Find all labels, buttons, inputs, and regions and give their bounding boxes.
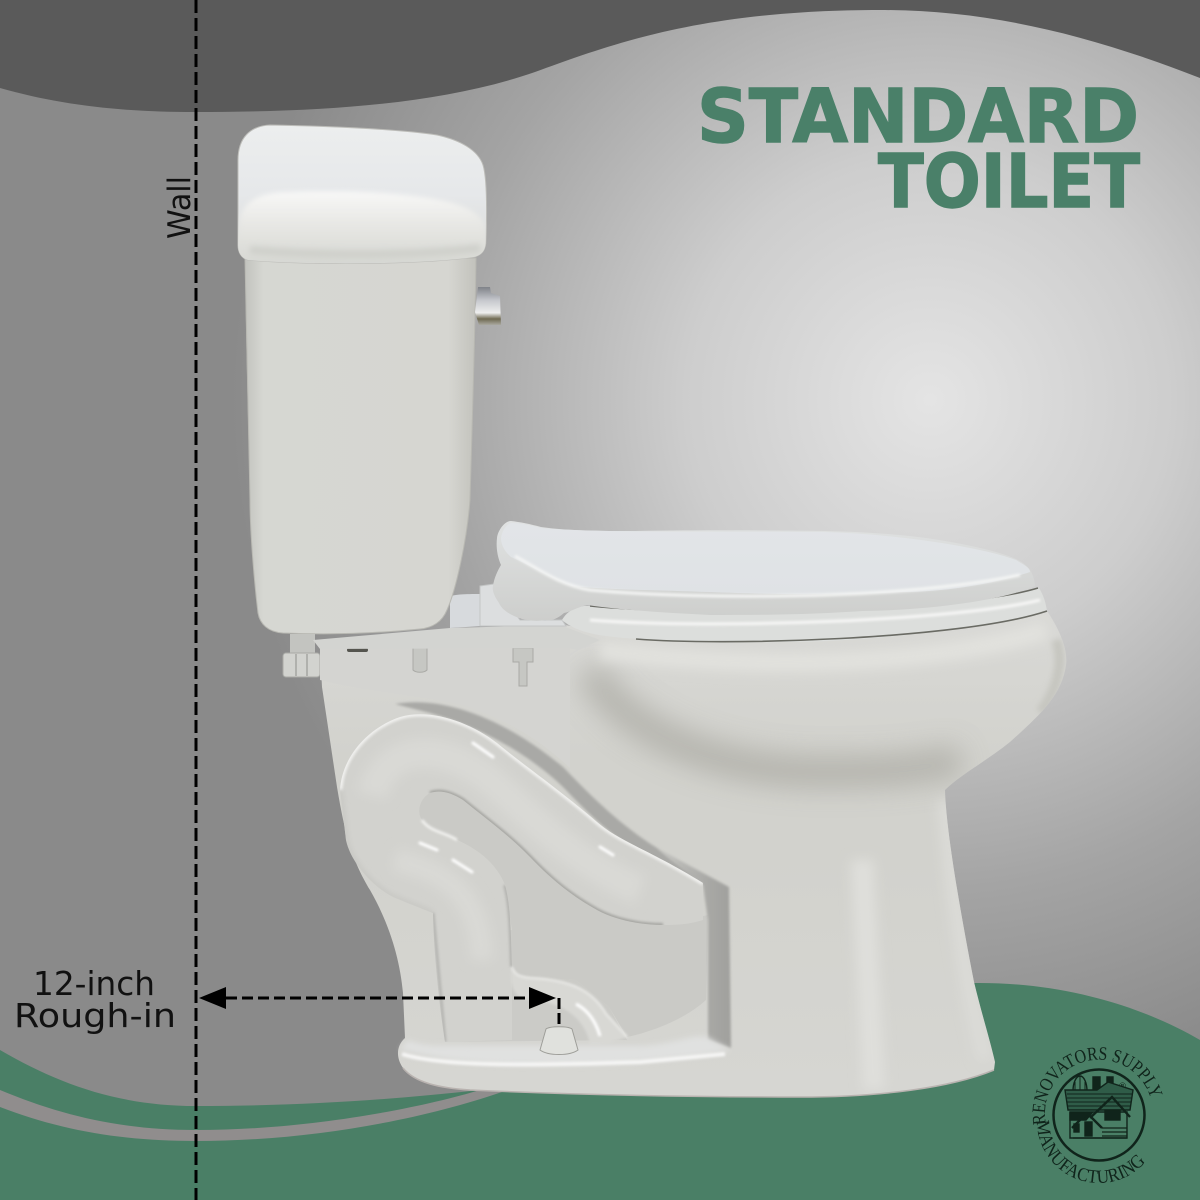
supply nut	[283, 634, 320, 677]
logo: Renovators Supply Manufacturing: MANUFACTURING	[1036, 1120, 1144, 1183]
bolt cap	[540, 1027, 578, 1054]
wall dashed line	[194, 0, 198, 1200]
trapway hole edge	[422, 820, 457, 840]
recess wall	[657, 848, 731, 1048]
rear deck hinge block	[450, 594, 482, 628]
tank	[245, 258, 476, 634]
bowl deck plate	[313, 625, 600, 650]
flush handle	[475, 287, 501, 325]
hinge plate	[480, 584, 566, 626]
logo house	[1065, 1076, 1133, 1138]
foot rim	[400, 1036, 994, 1097]
seat ring	[562, 588, 1047, 642]
title	[697, 74, 1140, 225]
logo: Renovators Supply Manufacturing	[1032, 1047, 1162, 1183]
trapway S-bend	[340, 714, 703, 1042]
title: TOILET	[878, 139, 1140, 225]
rough-in label	[14, 964, 176, 1035]
rough-in dimension arrow	[199, 987, 559, 1028]
body shading	[590, 630, 1059, 1090]
trapway soft light and edge	[340, 714, 703, 1042]
lid front rim	[238, 191, 486, 264]
seat lid	[493, 521, 1035, 621]
left arrowhead	[199, 987, 226, 1009]
dark wave band at top	[0, 0, 1200, 112]
wall label: Wall	[162, 176, 198, 239]
drain elbow	[511, 967, 627, 1044]
grey stripe in the wave	[0, 1090, 502, 1141]
trapway highlights	[420, 743, 613, 872]
tank lid	[238, 125, 487, 263]
rear block under the deck	[320, 646, 570, 768]
green wave at bottom	[0, 983, 1200, 1200]
logo: Renovators Supply Manufacturing: ®	[1118, 1082, 1127, 1092]
seat lid top face	[501, 523, 1030, 594]
logo: Renovators Supply Manufacturing: RENOVATORS SUPPLY	[1032, 1047, 1162, 1125]
rough-in label: 12-inch	[33, 964, 155, 1003]
seat ring shadow lines	[590, 588, 1047, 642]
toilet	[232, 125, 1066, 1097]
bowl and pedestal body	[320, 611, 1066, 1097]
title: STANDARD	[697, 74, 1139, 160]
slot inside the bend	[419, 792, 597, 930]
right arrowhead	[529, 987, 556, 1009]
shadow crescent above the trapway	[395, 702, 703, 883]
cavity behind the trapway	[419, 792, 731, 1048]
rough-in label: Rough-in	[14, 996, 176, 1035]
seat lid edge highlight	[515, 556, 1020, 596]
tank bolts	[347, 648, 533, 686]
